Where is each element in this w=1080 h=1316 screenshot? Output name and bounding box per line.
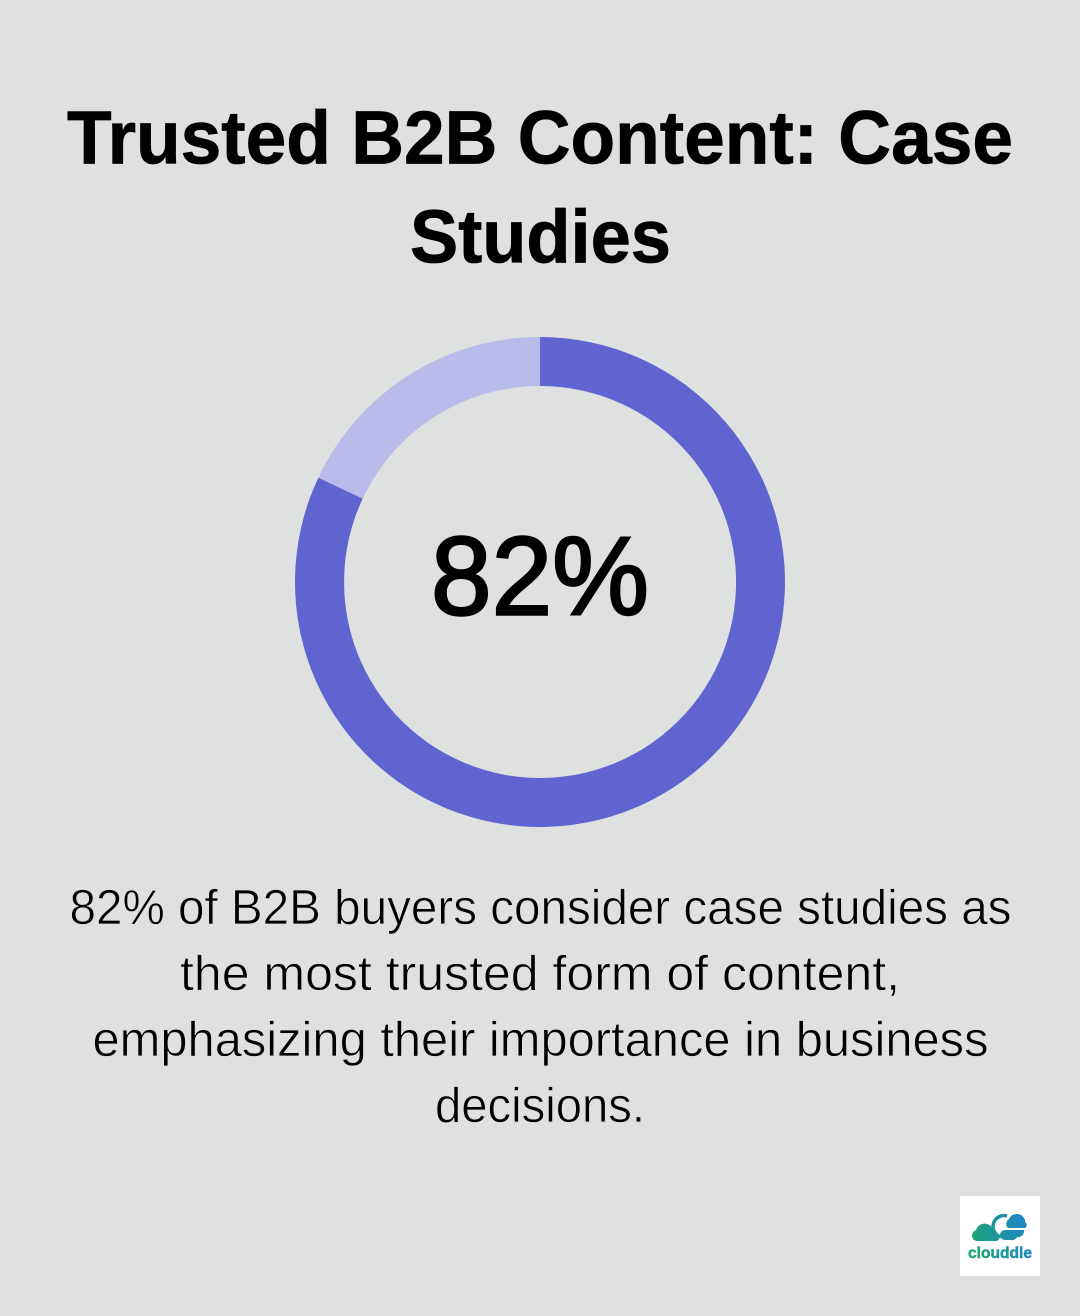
description text: the most trusted form of content, (180, 946, 900, 1001)
donut value: 82% (431, 514, 649, 638)
82% segment (295, 337, 785, 827)
description text: emphasizing their importance in business (92, 1012, 988, 1067)
title: Studies (410, 194, 671, 278)
description text: decisions. (435, 1078, 645, 1133)
description text: 82% of B2B buyers consider case studies as (70, 880, 1012, 935)
logo: clouddle (960, 1196, 1040, 1276)
donut chart: 82% (295, 337, 785, 827)
remaining 18% segment (318, 337, 540, 499)
title: Trusted B2B Content: Case (67, 96, 1013, 180)
icon: clouds (972, 1214, 1027, 1241)
description text (70, 880, 1012, 1133)
title (67, 96, 1013, 278)
logo wordmark: clouddle (968, 1245, 1032, 1262)
